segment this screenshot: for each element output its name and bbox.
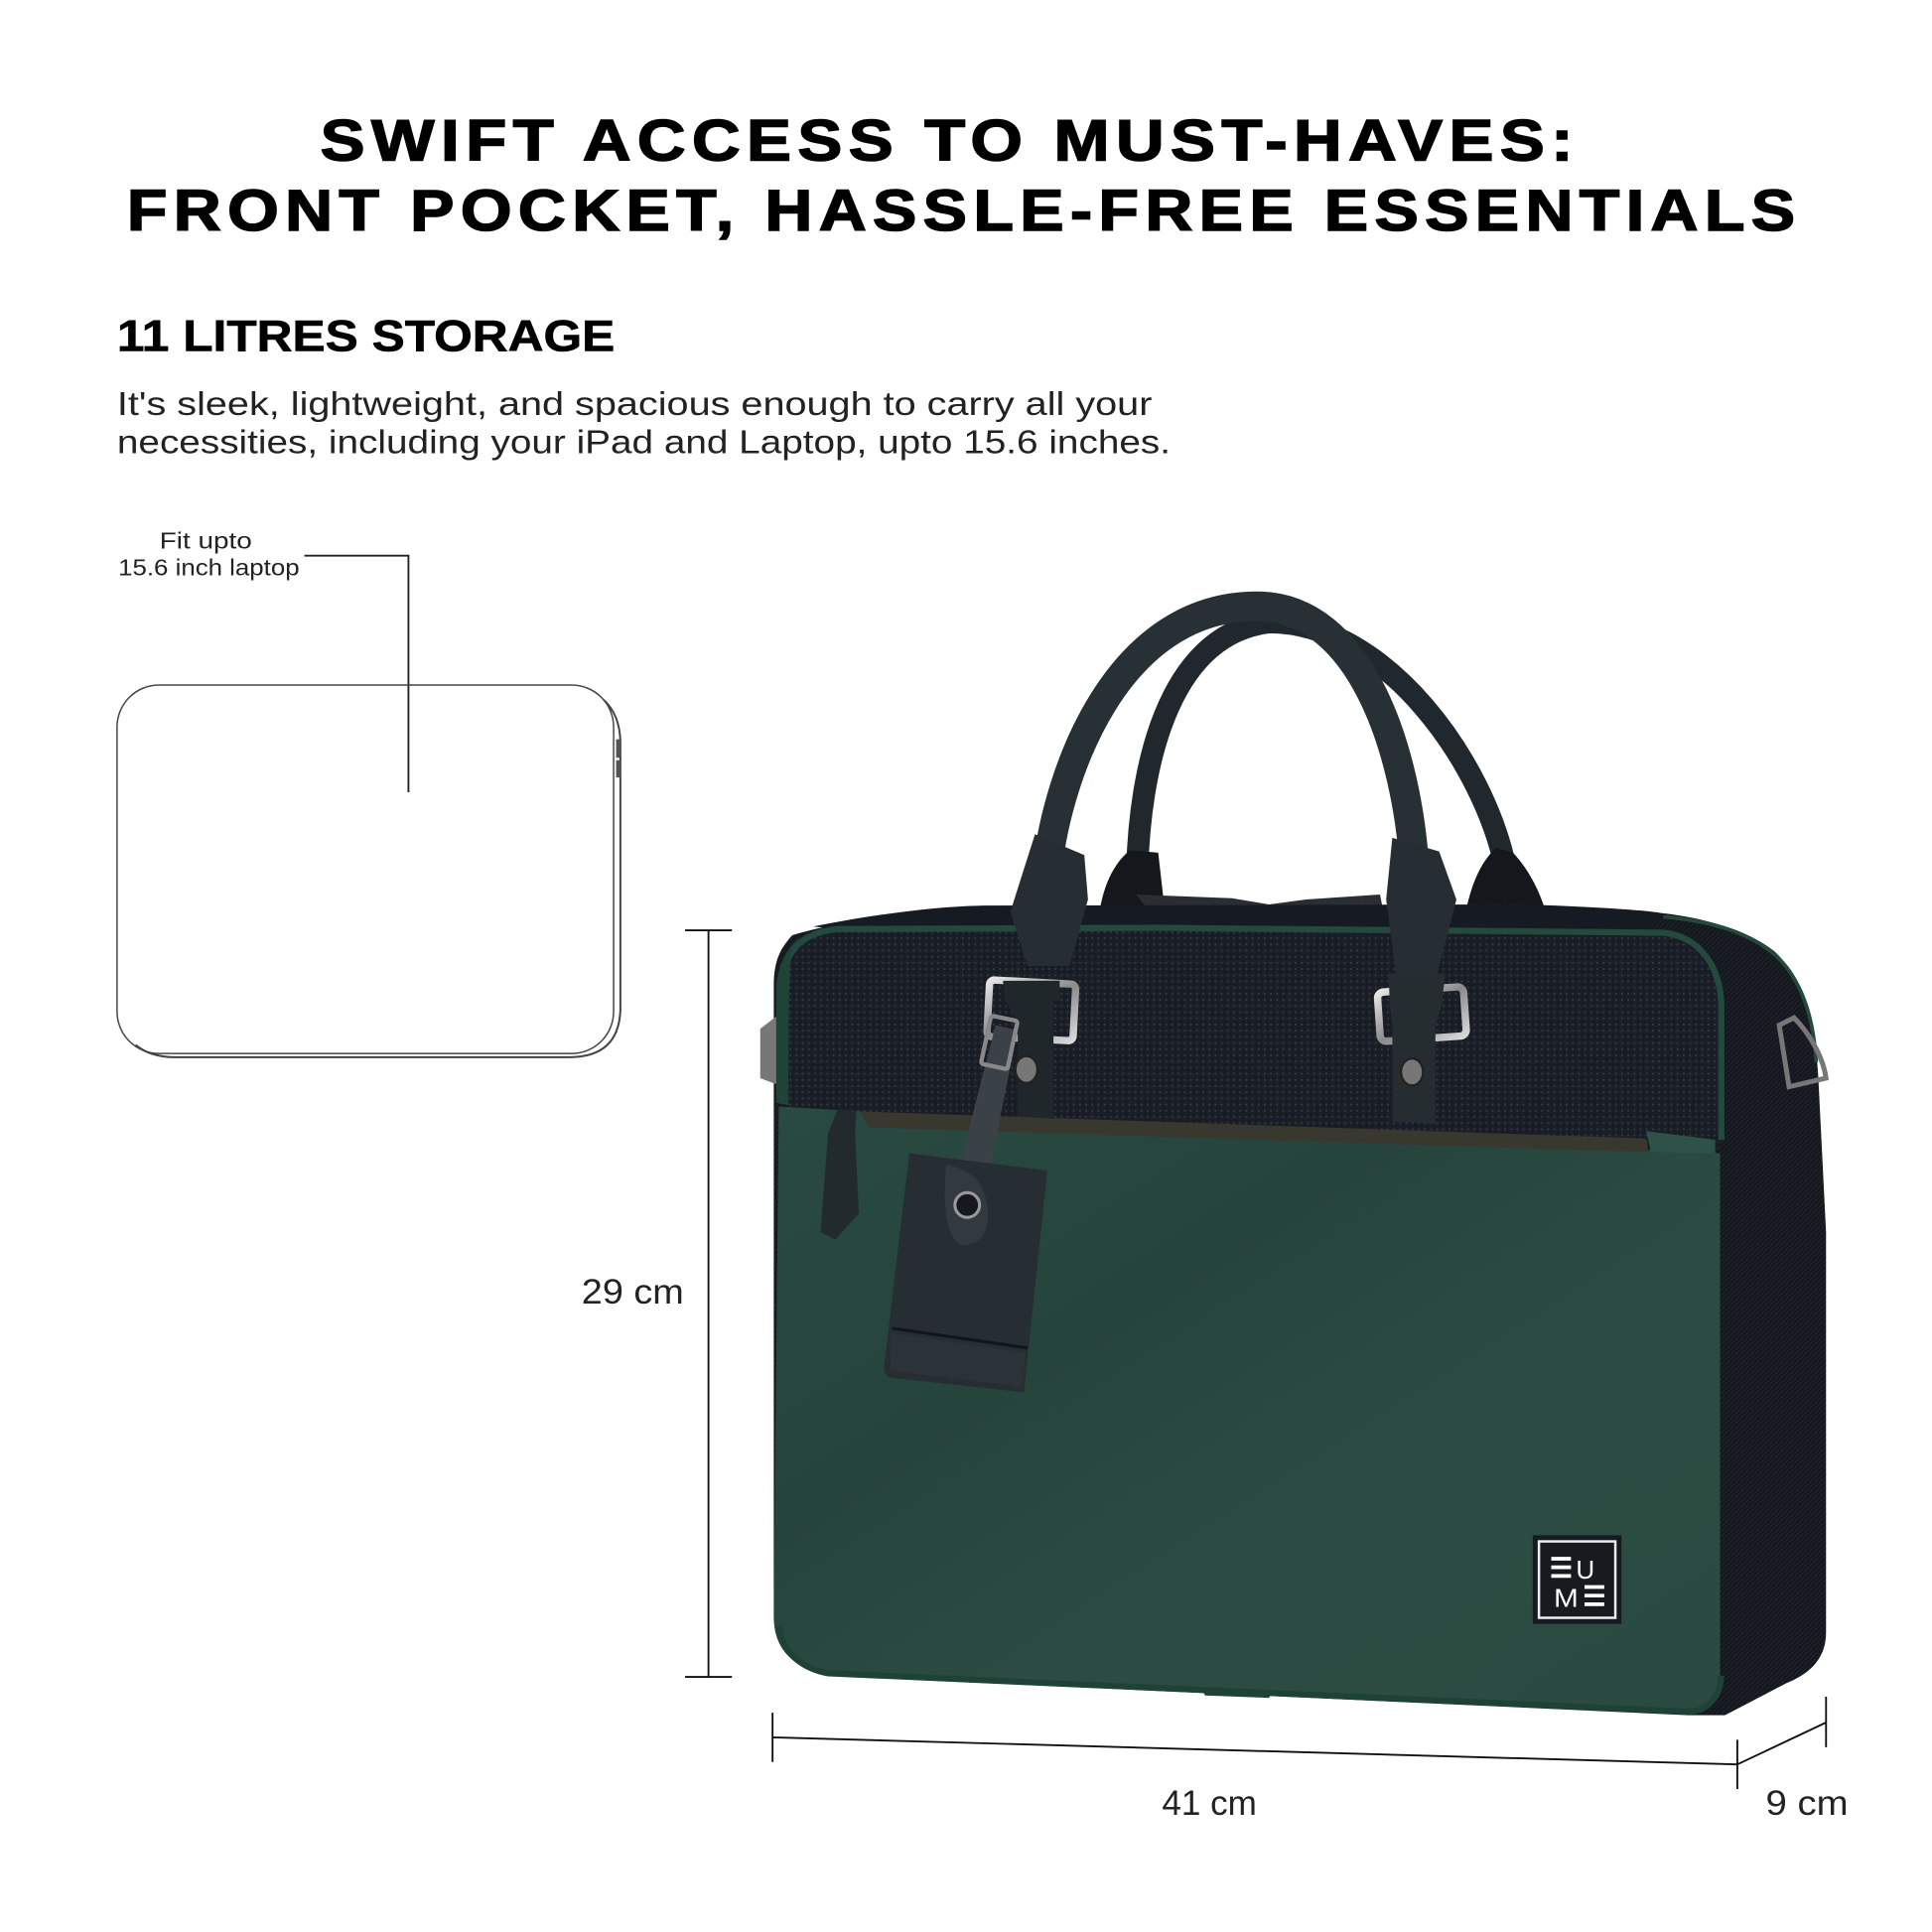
- bag side and back body: [773, 904, 1826, 1716]
- brand badge: U: [1576, 1555, 1594, 1585]
- dimension: width and depth: [772, 1697, 1826, 1789]
- title: SWIFT ACCESS TO MUST-HAVES:: [321, 108, 1580, 173]
- left shoulder ring: [760, 1017, 776, 1084]
- top zipper pulls: [1136, 895, 1382, 906]
- bottom tab: [1201, 1688, 1272, 1698]
- callout: laptop fit: [118, 527, 408, 792]
- rear handle: [1100, 622, 1545, 909]
- description text: It's sleek, lightweight, and spacious enough to carry all your: [117, 385, 1152, 422]
- label: 29 cm: 29 cm: [582, 1274, 684, 1311]
- left strap loop: [1003, 981, 1059, 1119]
- callout: laptop fit: 15.6 inch laptop: [118, 555, 300, 581]
- luggage tag: [884, 1154, 1047, 1392]
- bag photo illustration: [760, 607, 1826, 1716]
- subheading: 11 litres storage: 11 LITRES STORAGE: [117, 313, 615, 361]
- rivets: [1016, 1056, 1423, 1085]
- handle sleeves: [1011, 834, 1456, 981]
- label: 9 cm: 9 cm: [1765, 1785, 1849, 1823]
- luggage tag strap: [949, 1026, 1018, 1213]
- bottom piping: [778, 1626, 1722, 1712]
- brand badge: M: [1554, 1583, 1579, 1612]
- rear side green piping: [1663, 916, 1816, 1062]
- top nylon band: [813, 905, 1663, 929]
- zipper pull: [821, 1109, 859, 1240]
- right silver buckle: [1377, 987, 1466, 1041]
- description text: necessities, including your iPad and Laptop, upto 15.6 inches.: [117, 424, 1171, 461]
- green piping: [782, 928, 1722, 1140]
- title: FRONT POCKET, HASSLE-FREE ESSENTIALS: [127, 179, 1801, 243]
- upper mesh panel: [788, 926, 1721, 1152]
- title: [127, 108, 1801, 243]
- icon: laptop outline: [117, 685, 621, 1057]
- description text: [117, 385, 1171, 461]
- pocket zipper: [860, 1111, 1649, 1152]
- right shoulder ring: [1779, 1018, 1826, 1087]
- right strap loop: [1389, 973, 1446, 1124]
- callout: laptop fit: Fit upto: [160, 527, 252, 553]
- label: 41 cm: 41 cm: [1162, 1785, 1257, 1823]
- brand badge: [1533, 1535, 1621, 1624]
- green front pocket: [773, 1106, 1721, 1713]
- front handle: [1047, 607, 1415, 869]
- dimension: height: [685, 930, 732, 1677]
- left silver buckle: [987, 980, 1076, 1040]
- tag buckle: [981, 1016, 1018, 1069]
